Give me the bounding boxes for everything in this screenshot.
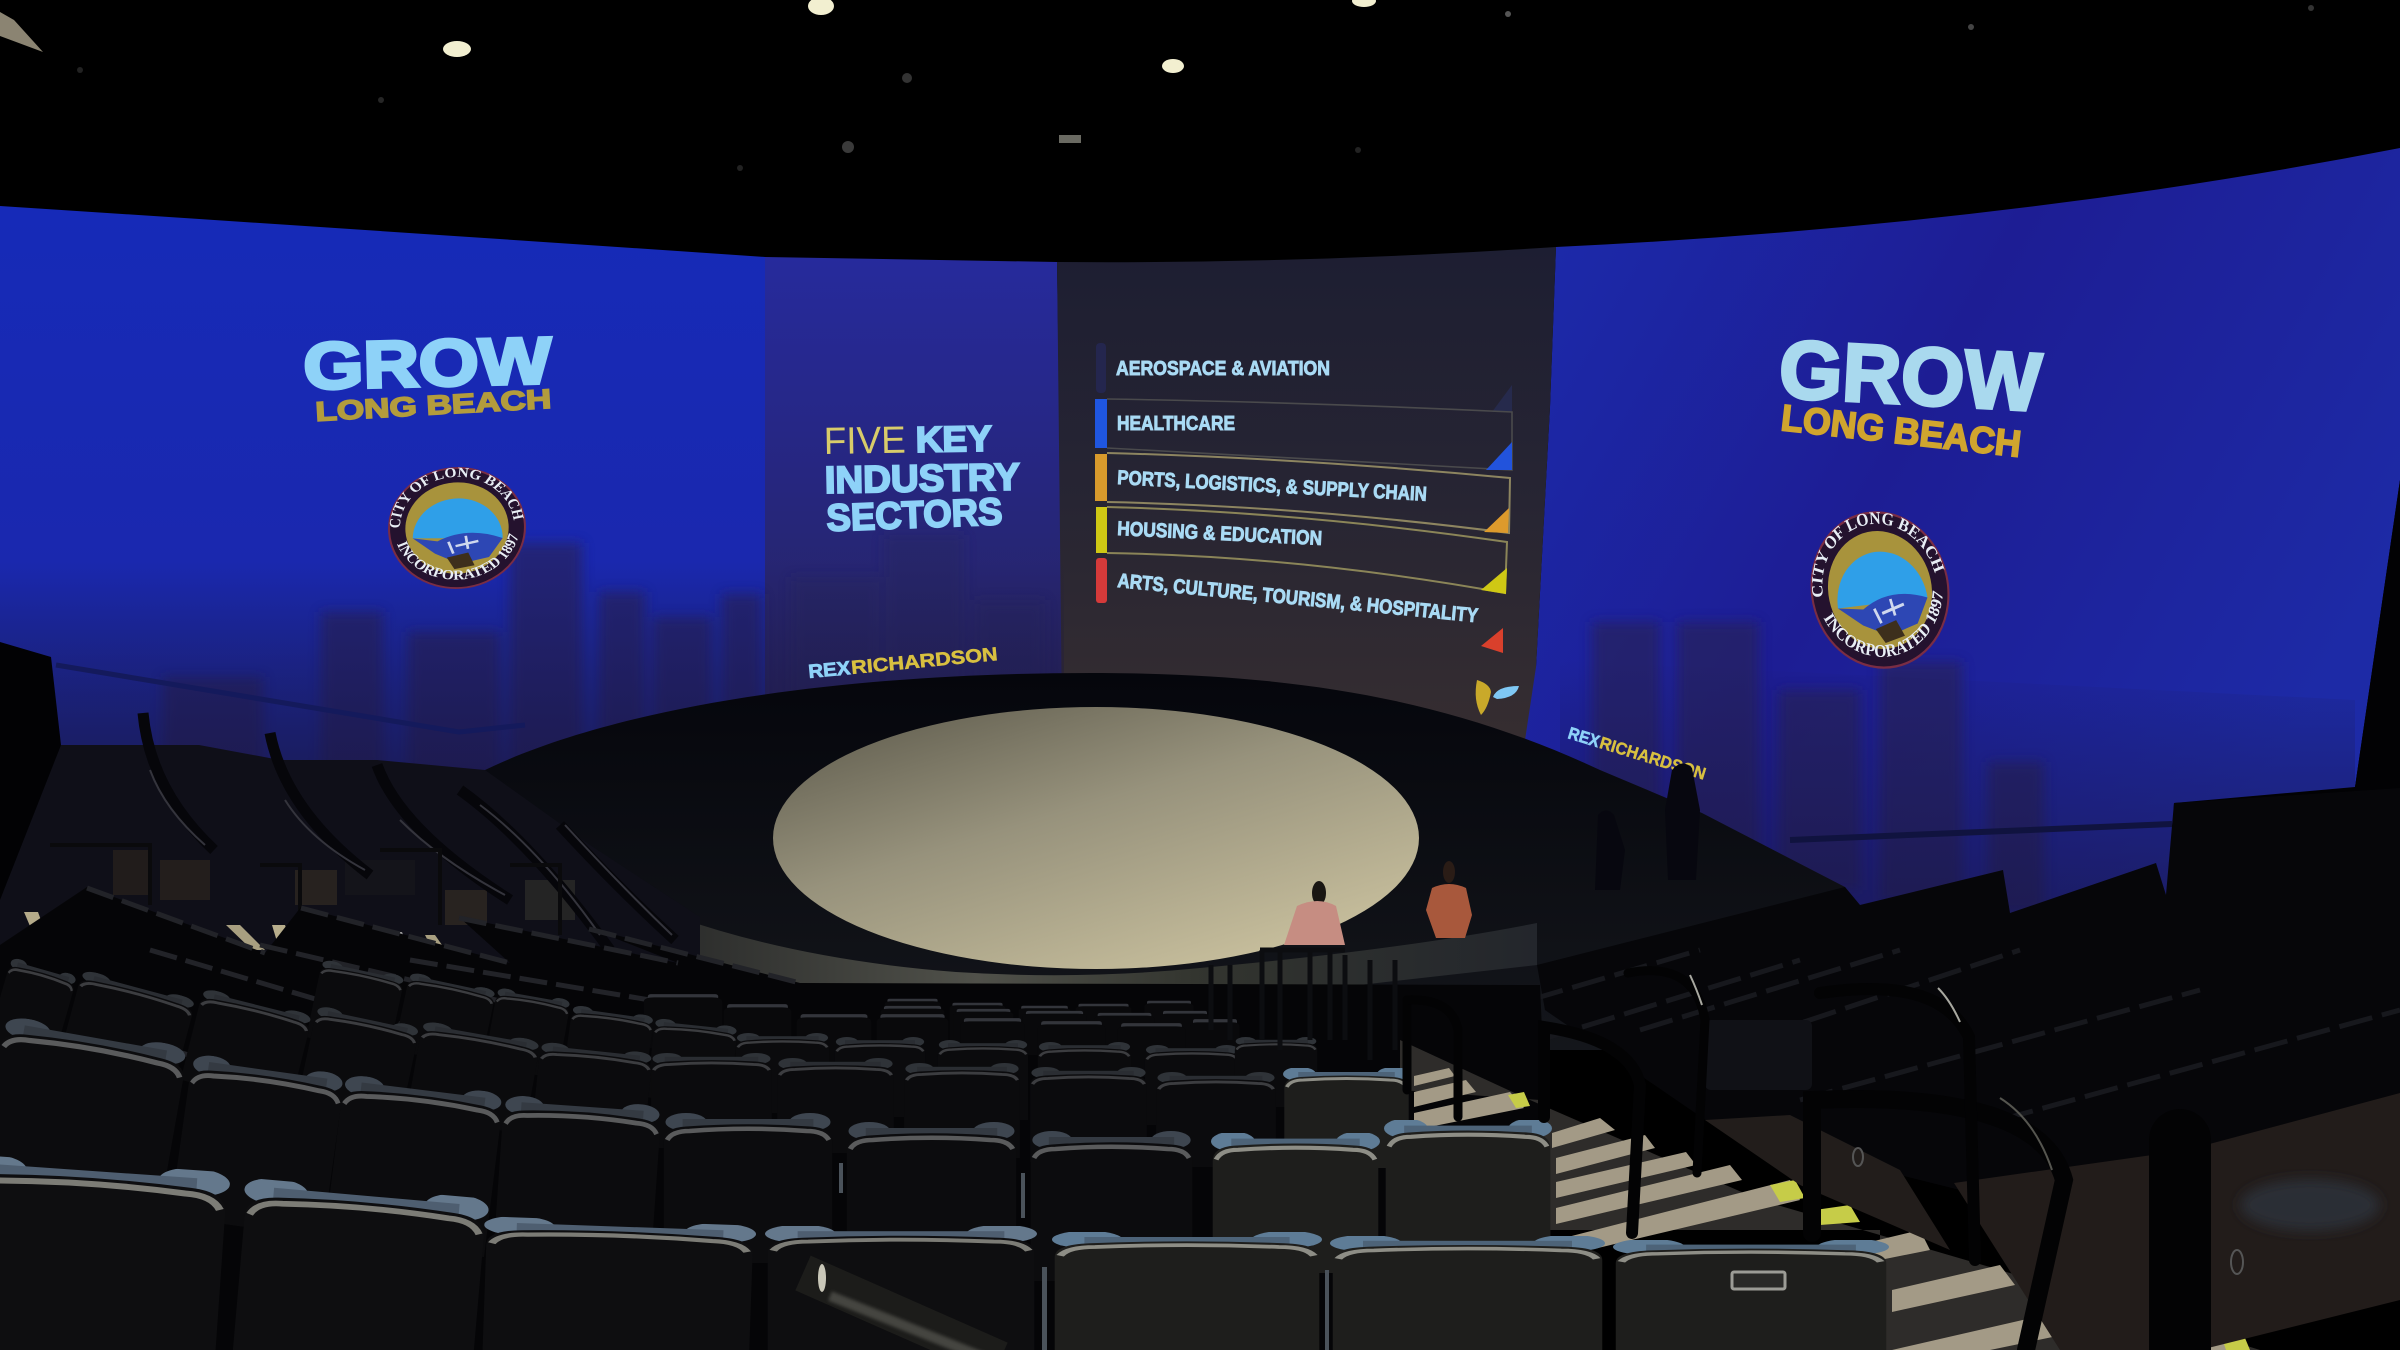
left aisle area — [0, 713, 700, 1010]
black wall block left — [0, 642, 61, 960]
GROW logo left: GROW — [303, 323, 553, 403]
heading: five key industry sectors: SECTORS — [826, 491, 1003, 540]
skyline silhouette left — [163, 535, 1045, 822]
GROW logo left — [303, 323, 553, 427]
aisle floor strip — [1705, 1115, 1950, 1250]
Rex Richardson mark left: REX — [807, 658, 852, 683]
stage guard rails — [1211, 950, 1395, 1060]
circular stage floor — [773, 707, 1419, 969]
seat row E — [644, 994, 1240, 1077]
sector: ports — [1095, 453, 1510, 533]
handrails right — [1407, 971, 2180, 1350]
city seal right — [1810, 511, 1950, 669]
seat row B — [0, 1015, 1552, 1281]
sector: arts — [1096, 558, 1503, 653]
GROW logo right: LONG BEACH — [1779, 397, 2023, 465]
sector: arts: ARTS, CULTURE, TOURISM, & HOSPITALITY — [1117, 570, 1479, 627]
sector list — [1095, 343, 1512, 653]
sector: healthcare — [1095, 399, 1512, 470]
seat number plate — [1732, 1272, 1785, 1289]
black wall block right — [2166, 480, 2400, 960]
sector: aerospace — [1096, 343, 1512, 412]
city seal left: INCORPORATED 1897 — [397, 533, 518, 580]
sector: housing — [1096, 507, 1507, 594]
aisle floor right — [1954, 1093, 2400, 1350]
person in pink shirt — [1284, 881, 1345, 945]
heading: five key industry sectors: INDUSTRY — [824, 457, 1020, 502]
seat row D — [306, 959, 1317, 1125]
right seating block — [1530, 788, 2400, 1190]
sector: aerospace: AEROSPACE & AVIATION — [1116, 358, 1330, 380]
screen rail left — [56, 665, 525, 732]
stage front wall — [677, 917, 1537, 1004]
stairs with lit treads — [1400, 1040, 2260, 1350]
right seat cushions — [2240, 1179, 2380, 1231]
seat row F — [881, 1006, 1210, 1057]
icon: leaf logo — [1476, 680, 1519, 715]
seat row A — [0, 1151, 1889, 1350]
sector: ports: PORTS, LOGISTICS, & SUPPLY CHAIN — [1117, 467, 1427, 506]
panel: central dark slide — [1057, 247, 1556, 760]
heading: five key industry sectors: KEY — [915, 418, 992, 460]
screen lower shading left — [0, 560, 1064, 800]
screen lower shading right — [1560, 660, 2355, 960]
seat row C — [0, 957, 1410, 1168]
GROW logo left: LONG BEACH — [315, 384, 552, 427]
foreground handrail — [803, 1264, 1000, 1350]
city seal right: INCORPORATED 1897 — [1824, 590, 1942, 657]
city seal left — [388, 467, 526, 589]
heading: five key industry sectors — [823, 418, 1020, 540]
Rex Richardson mark right — [1566, 724, 1708, 784]
silhouette figures at back of stage — [1595, 763, 1700, 890]
city seal left: CITY OF LONG BEACH — [390, 468, 524, 528]
handrail highlights — [1690, 975, 2243, 1274]
panel: left blue screen — [0, 206, 765, 820]
sector: housing: HOUSING & EDUCATION — [1117, 518, 1323, 550]
sector: healthcare: HEALTHCARE — [1117, 413, 1235, 435]
seat row G — [885, 999, 1194, 1045]
person in orange shirt — [1426, 861, 1472, 938]
screen rail right — [1790, 824, 2172, 840]
seat slits — [839, 1163, 1329, 1350]
back seat rows left — [0, 887, 1556, 1350]
skyline silhouette right — [1592, 622, 2044, 912]
heading: five key industry sectors: FIVE — [823, 420, 906, 463]
panel: right blue screen — [1500, 148, 2400, 960]
GROW logo right: GROW — [1777, 324, 2044, 429]
city seal right: CITY OF LONG BEACH — [1812, 512, 1944, 597]
Rex Richardson mark left — [807, 644, 999, 683]
Rex Richardson mark left: RICHARDSON — [850, 644, 999, 679]
stage hull — [300, 673, 1900, 1050]
panel: middle-left screen — [765, 257, 1064, 720]
Rex Richardson mark right: REX — [1566, 724, 1603, 751]
Rex Richardson mark right: RICHARDSON — [1597, 733, 1708, 784]
